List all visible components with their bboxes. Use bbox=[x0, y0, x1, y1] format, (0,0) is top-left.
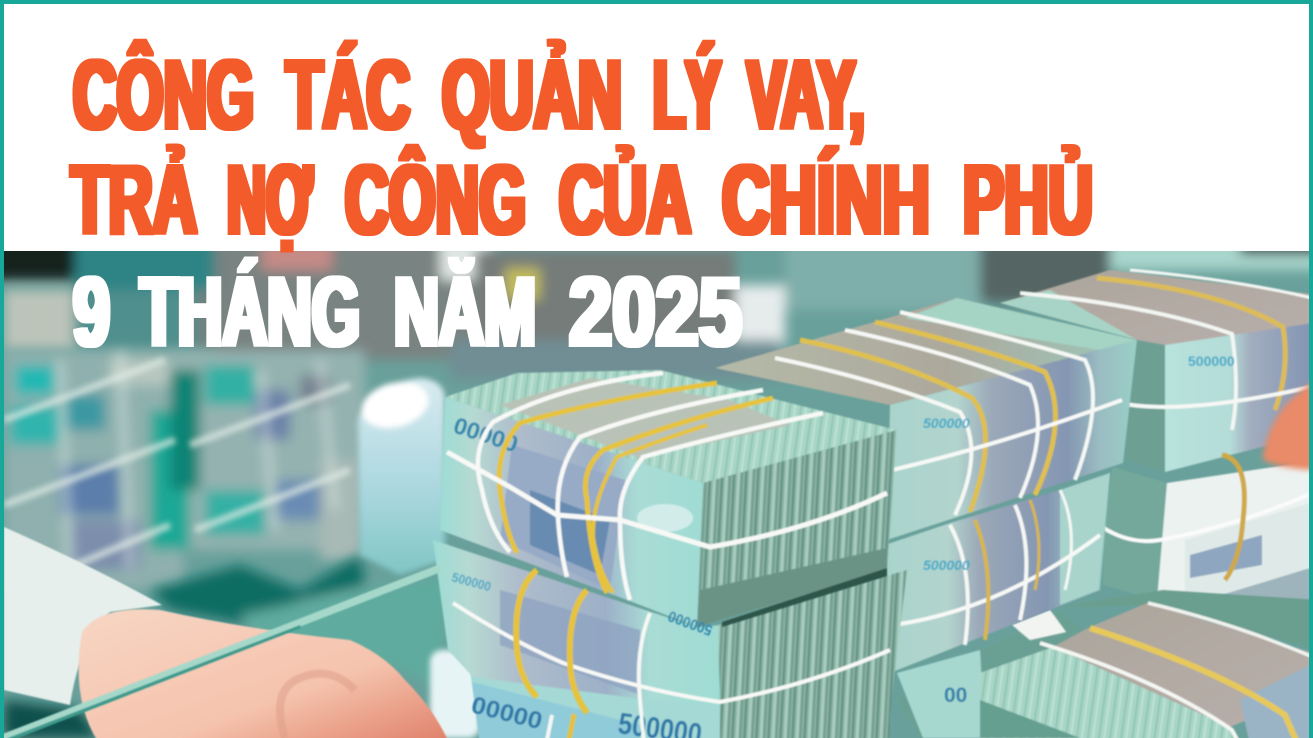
title line 2: NỢ bbox=[227, 144, 312, 254]
sleeve bbox=[4, 527, 162, 705]
stack: centre right, upper: 500000 bbox=[923, 415, 970, 431]
stack: white, right bbox=[1102, 455, 1313, 612]
main bundle: upper: 500000 bbox=[666, 607, 715, 639]
subtitle: 9 bbox=[73, 256, 110, 366]
stack: centre right, upper bbox=[715, 298, 1137, 540]
photo: stacks of banknotes bbox=[0, 235, 1313, 738]
main bundle: upper bbox=[440, 370, 897, 639]
title line 2: CÔNG bbox=[345, 144, 526, 254]
strap lines bbox=[478, 373, 663, 552]
main bundle: bottom notes bbox=[470, 674, 890, 738]
hand bbox=[79, 609, 450, 738]
glass edge bbox=[0, 564, 441, 738]
subtitle bbox=[73, 256, 742, 366]
stack: lower right foreground: 00 bbox=[944, 684, 967, 707]
title line 2 bbox=[71, 144, 1093, 254]
title line 1: VAY, bbox=[747, 40, 865, 150]
title bbox=[71, 40, 1093, 254]
subtitle: THÁNG bbox=[140, 256, 360, 366]
dark table shadow bbox=[4, 555, 450, 738]
title line 2: CHÍNH bbox=[722, 144, 930, 254]
title line 1: QUẢN bbox=[442, 40, 622, 150]
stack: centre right, lower: 500000 bbox=[923, 557, 970, 573]
header background bbox=[0, 0, 1313, 251]
title line 1 bbox=[73, 40, 865, 150]
title line 2: TRẢ bbox=[71, 144, 197, 254]
blurred left stacks bbox=[4, 350, 365, 590]
subtitle: 2025 bbox=[569, 256, 742, 366]
main bundle: lower bbox=[433, 540, 907, 738]
right hand bbox=[1263, 375, 1313, 470]
main bundle: upper: 00000 bbox=[450, 412, 521, 457]
title line 2: PHỦ bbox=[963, 144, 1093, 254]
stack: centre right, lower bbox=[885, 473, 1110, 673]
title line 1: LÝ bbox=[653, 40, 721, 150]
stack: upper right bbox=[1000, 270, 1313, 472]
title line 1: CÔNG bbox=[73, 40, 254, 150]
light cylinder bbox=[356, 375, 480, 738]
blurred background scenery bbox=[4, 251, 1309, 380]
title line 1: TÁC bbox=[286, 40, 410, 150]
title line 2: CỦA bbox=[559, 144, 691, 254]
stack: lower right foreground bbox=[895, 590, 1313, 738]
stack: upper right: 500000 bbox=[1188, 353, 1235, 369]
subtitle: NĂM bbox=[394, 256, 536, 366]
main bundle: bottom notes: 00000 bbox=[469, 692, 545, 735]
main bundle: lower: 500000 bbox=[450, 569, 493, 594]
